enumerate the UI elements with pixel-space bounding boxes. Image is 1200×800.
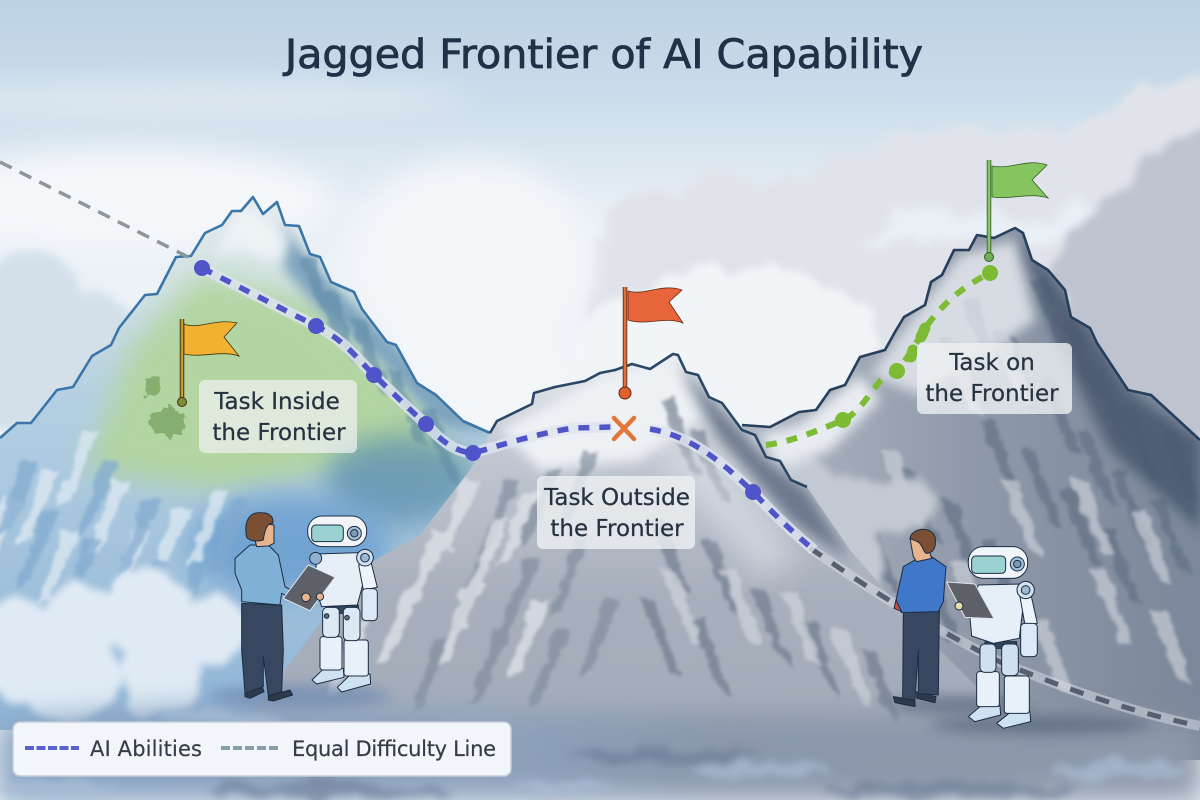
flag: red xyxy=(619,287,683,399)
legend key: AI abilities: AI Abilities xyxy=(90,737,202,761)
green vegetation patches xyxy=(143,378,188,436)
legend xyxy=(13,722,511,776)
robot, left xyxy=(308,516,377,692)
label: task inside the frontier: Task Inside xyxy=(213,389,340,415)
left mountain xyxy=(0,197,490,730)
label: task on the frontier: the Frontier xyxy=(925,381,1059,407)
robot, right xyxy=(947,547,1037,728)
marker: X outside frontier xyxy=(614,418,634,439)
label: task inside the frontier: the Frontier xyxy=(212,420,346,446)
right mountain xyxy=(742,228,1200,760)
equal difficulty line lower segment xyxy=(810,548,1200,726)
center mountain xyxy=(254,352,976,730)
flag: green xyxy=(984,160,1048,262)
label: task on the frontier xyxy=(917,343,1072,414)
label: task outside the frontier xyxy=(537,476,695,549)
label: task on the frontier: Task on xyxy=(948,350,1035,376)
clouds xyxy=(0,72,1200,460)
foreground ground and mist xyxy=(0,684,1200,800)
label: task outside the frontier: Task Outside xyxy=(543,485,690,511)
title: Jagged Frontier of AI Capability xyxy=(282,32,923,78)
AI abilities line xyxy=(202,268,814,550)
AI abilities points xyxy=(194,260,761,500)
legend key: equal difficulty line: Equal Difficulty Line xyxy=(292,737,496,761)
AI frontier line on green task xyxy=(766,265,998,445)
person with clipboard, right xyxy=(893,529,946,707)
label: task outside the frontier: the Frontier xyxy=(550,516,684,542)
label: task inside the frontier xyxy=(199,380,357,453)
equal difficulty line upper segment xyxy=(0,162,190,258)
person with tablet, left xyxy=(235,513,335,701)
flag: yellow xyxy=(178,319,239,406)
